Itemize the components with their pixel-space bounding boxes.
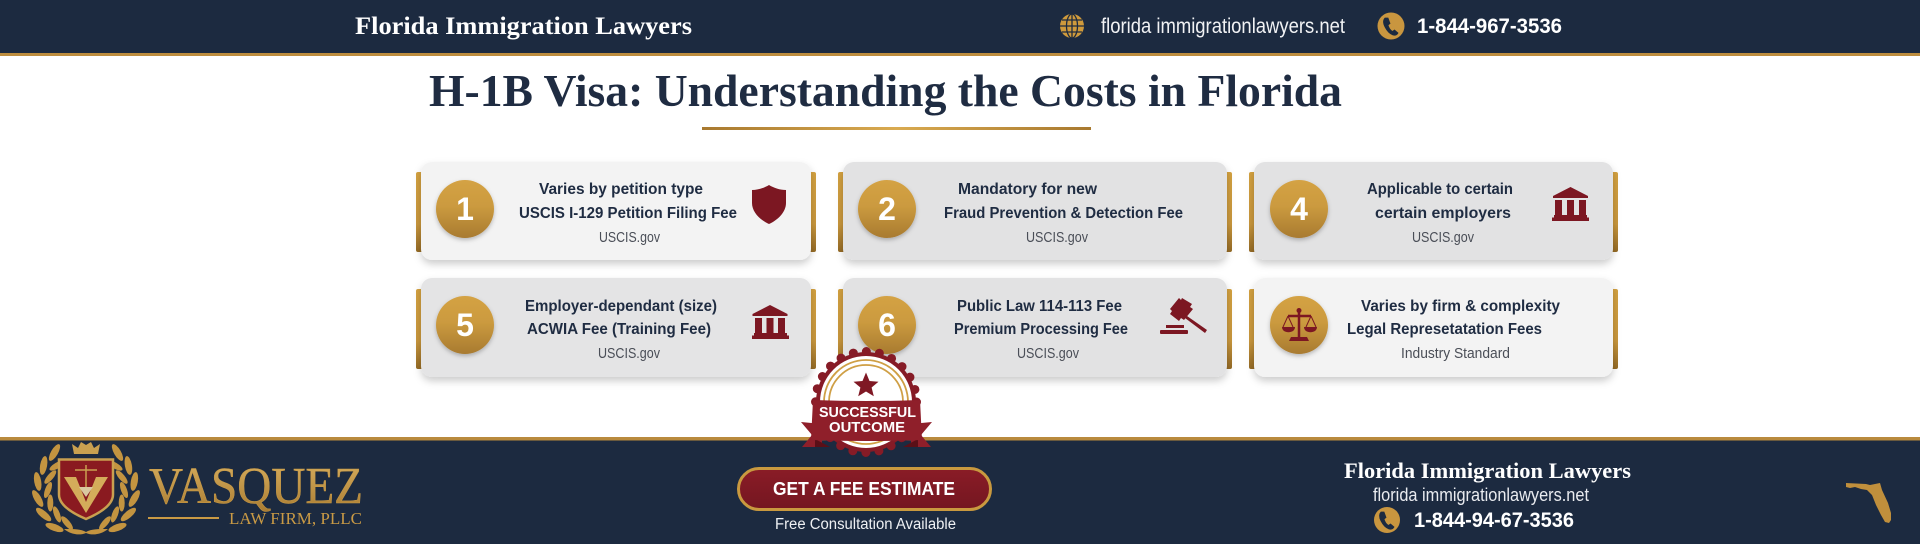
card 5 text: ACWIA Fee (Training Fee) (527, 321, 711, 338)
card 7 text: Legal Represetatation Fees (1347, 321, 1542, 338)
icon: crown (72, 442, 100, 454)
card 6 text: USCIS.gov (1017, 346, 1080, 362)
icon: courthouse (1552, 187, 1589, 221)
card 5: ACWIA fee (416, 278, 816, 377)
card 2 text (944, 181, 1183, 246)
header firm name: Florida Immigration Lawyers (355, 13, 692, 40)
icon: globe (1060, 14, 1084, 38)
firm logo (30, 442, 363, 534)
icon: shield with V (59, 460, 113, 519)
number badge 2 (858, 180, 916, 238)
header website: florida immigrationlawyers.net (1101, 15, 1345, 38)
top header bar (0, 0, 1920, 56)
card 1 text: Varies by petition type (539, 181, 703, 198)
successful outcome seal (801, 352, 932, 452)
title underline (702, 127, 1091, 130)
firm wordmark: VASQUEZ (149, 458, 363, 515)
card 6 text (954, 298, 1128, 362)
icon: phone (1378, 12, 1404, 40)
icon: laurel wreath (30, 443, 142, 534)
card 4 text (1367, 181, 1513, 246)
footer contact block (1344, 458, 1631, 533)
ribbon banner (811, 400, 922, 441)
ribbon tails (801, 422, 932, 447)
button: get a fee estimate: GET A FEE ESTIMATE (773, 478, 955, 499)
card 7 text (1347, 298, 1560, 362)
icon: courthouse (752, 305, 789, 339)
icon: phone (1374, 507, 1400, 533)
card 4 text: Applicable to certain (1367, 181, 1513, 198)
card 2 text: USCIS.gov (1026, 230, 1089, 246)
card 2 text: Mandatory for new (958, 181, 1098, 198)
card 2: fraud prevention fee (838, 162, 1232, 260)
number badge 1: 1 (456, 191, 474, 227)
number badge 6 (858, 296, 916, 354)
header phone number: 1-844-967-3536 (1417, 15, 1562, 38)
number badge 5 (436, 296, 494, 354)
number badge 5: 5 (456, 307, 474, 343)
number badge 4: 4 (1290, 191, 1308, 227)
footer bar (0, 437, 1920, 544)
ribbon banner: SUCCESSFUL (819, 404, 916, 421)
footer contact block: Florida Immigration Lawyers (1344, 458, 1631, 483)
card 6: premium processing fee (838, 278, 1232, 377)
icon: Florida map (1846, 483, 1891, 523)
consultation note: Free Consultation Available (775, 516, 956, 533)
icon: scales in gold circle (1270, 296, 1328, 354)
card 2 text: Fraud Prevention & Detection Fee (944, 205, 1183, 222)
card 4 text: certain employers (1375, 205, 1511, 222)
number badge 4 (1270, 180, 1328, 238)
card 7: legal representation fees (1249, 278, 1618, 377)
card 6 text: Premium Processing Fee (954, 321, 1128, 338)
seal disc (816, 352, 916, 452)
card 5 text (525, 298, 717, 362)
card 4 text: USCIS.gov (1412, 230, 1475, 246)
card 6 text: Public Law 114-113 Fee (957, 298, 1122, 315)
icon: gavel (1160, 298, 1207, 334)
footer contact block: 1-844-94-67-3536 (1414, 509, 1574, 532)
number badge 1 (436, 180, 494, 238)
card 1 text (519, 181, 737, 246)
button: get a fee estimate (738, 468, 990, 510)
icon: shield (752, 185, 786, 224)
card 1: petition filing fee (416, 162, 816, 260)
footer contact block: florida immigrationlawyers.net (1373, 485, 1589, 505)
card 5 text: USCIS.gov (598, 346, 661, 362)
card 1 text: USCIS I-129 Petition Filing Fee (519, 205, 737, 222)
card 7 text: Varies by firm & complexity (1361, 298, 1560, 315)
number badge 6: 6 (878, 307, 896, 343)
number badge 2: 2 (878, 191, 896, 227)
card 1 text: USCIS.gov (599, 230, 661, 246)
card 7 text: Industry Standard (1401, 346, 1510, 362)
title: H-1B Visa: Understanding the Costs in Florida (429, 65, 1342, 116)
icon: star (854, 372, 878, 396)
card 4: certain employers (1249, 162, 1618, 260)
firm subtitle: LAW FIRM, PLLC (229, 509, 362, 528)
ribbon banner: OUTCOME (829, 419, 905, 436)
card 5 text: Employer-dependant (size) (525, 298, 717, 315)
